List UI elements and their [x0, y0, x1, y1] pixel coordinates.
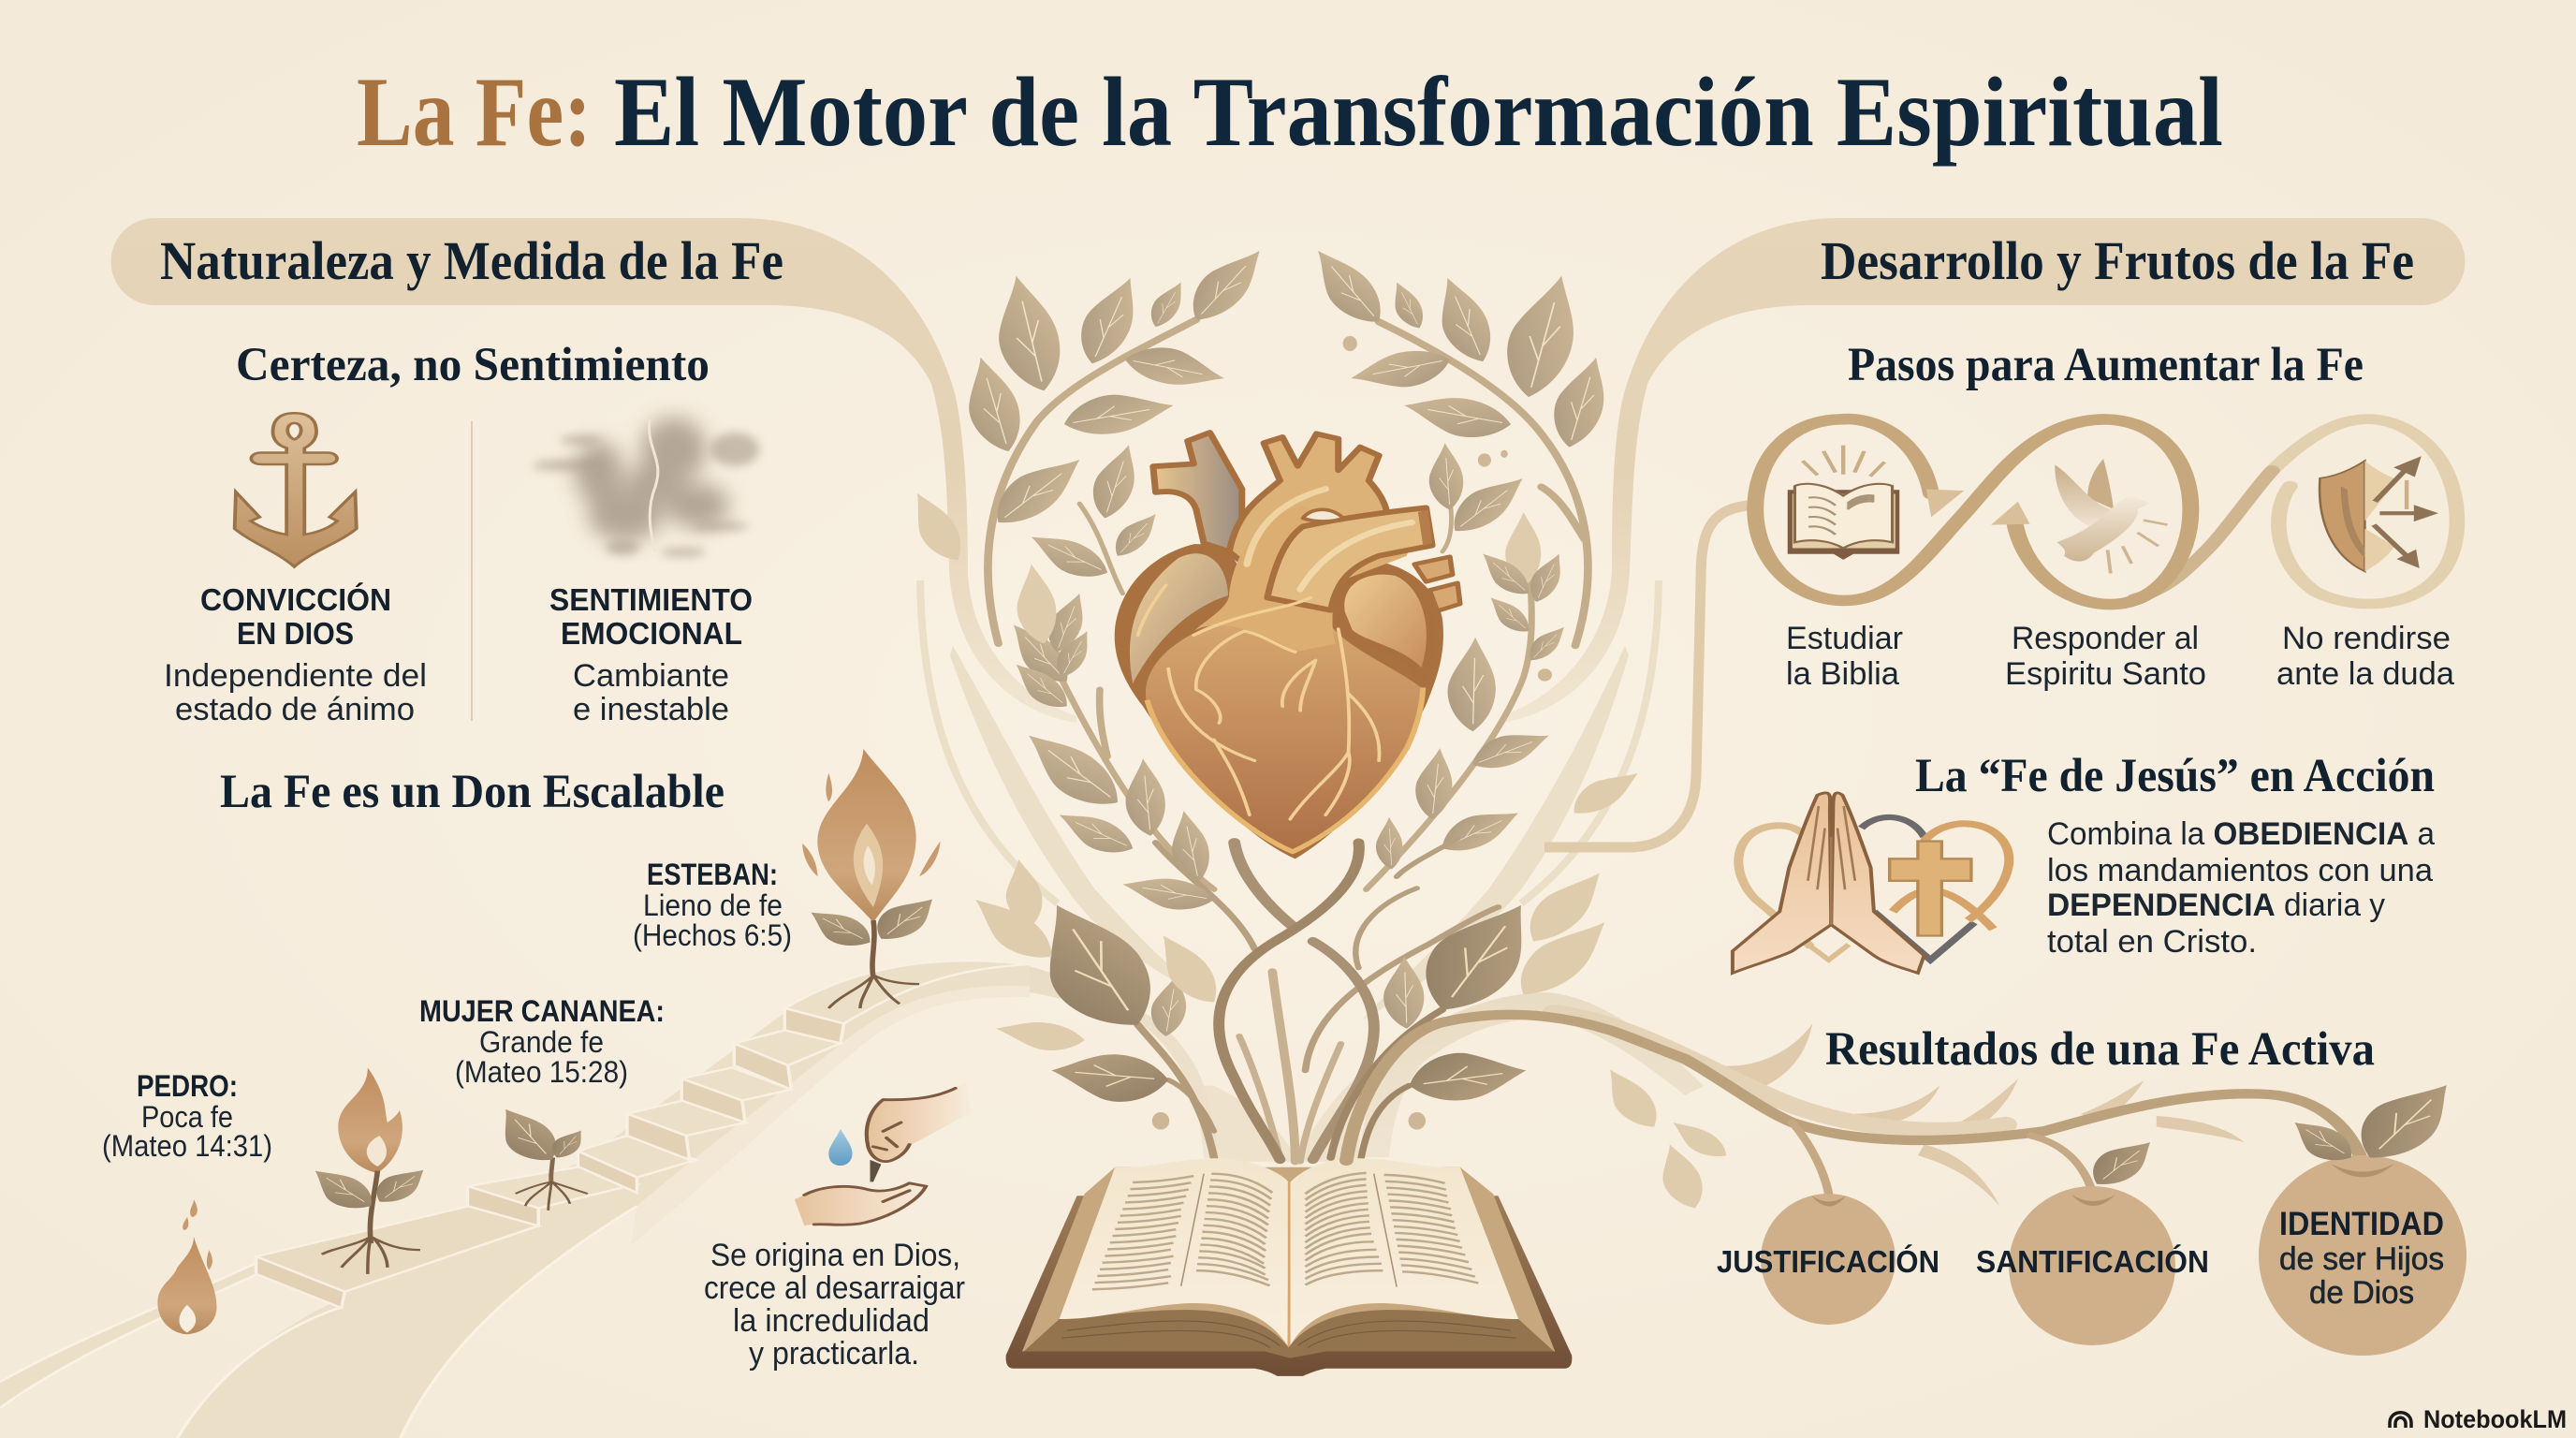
text: conviccion — [164, 582, 427, 727]
fruit: identidad: IDENTIDAD — [2279, 1206, 2444, 1242]
text: se origina en Dios — [704, 1238, 965, 1372]
labels: Esteban: (Hechos 6:5) — [633, 918, 792, 952]
icon: bible — [1788, 446, 1899, 560]
section header: left: Naturaleza y Medida de la Fe — [160, 230, 783, 291]
leaves — [900, 239, 1647, 885]
labels: Esteban: Lieno de fe — [643, 888, 783, 922]
title: La Fe: — [357, 57, 592, 167]
text: combina: Combina la OBEDIENCIA a — [2047, 816, 2435, 852]
labels: Mujer Cananea: (Mateo 15:28) — [455, 1055, 628, 1089]
panel: resultados de una fe activa — [1346, 1013, 2471, 1356]
icon: shield with arrows — [2320, 457, 2437, 571]
NotebookLM logo: NotebookLM — [2423, 1405, 2567, 1433]
icon: dove — [2055, 459, 2168, 573]
panel: certeza, no sentimiento — [164, 339, 759, 727]
step labels: Responder al — [2012, 621, 2199, 656]
labels: Mujer Cananea: Grande fe — [479, 1025, 604, 1059]
text: sentimiento: Cambiante — [573, 658, 729, 694]
icon: praying hands, heart and cross — [1733, 793, 2009, 973]
step labels: Espiritu Santo — [2005, 656, 2206, 692]
step labels: ante la duda — [2276, 656, 2454, 692]
text: se origina en Dios: crece al desarraigar — [704, 1270, 965, 1306]
text: se origina en Dios: y practicarla. — [749, 1336, 919, 1372]
fruit: identidad: de Dios — [2309, 1275, 2414, 1311]
icon: cloud of emotion — [533, 418, 759, 557]
text: sentimiento: e inestable — [573, 692, 729, 727]
text: conviccion: estado de ánimo — [175, 692, 415, 727]
icon: open book — [1006, 1158, 1572, 1376]
text: sentimiento — [549, 582, 753, 727]
tree of faith: lower stems and leaves — [959, 839, 1622, 1162]
labels: Pedro: Poca fe — [141, 1100, 233, 1134]
icon: notebooklm — [2390, 1413, 2411, 1428]
icon: large flame plant (Esteban) — [798, 749, 946, 1008]
fruit: justificacion — [1717, 1194, 1939, 1325]
icon: hands with seed and drop — [795, 1083, 972, 1225]
text: sentimiento: EMOCIONAL — [561, 616, 742, 651]
staircase — [0, 961, 1030, 1438]
labels: Pedro: (Mateo 14:31) — [102, 1129, 272, 1163]
labels: Mujer Cananea — [419, 994, 665, 1089]
labels: Esteban — [633, 858, 792, 952]
heart veins — [1138, 585, 1380, 819]
fruit: identidad: de ser Hijos — [2279, 1241, 2444, 1277]
step labels: Estudiar — [1786, 621, 1903, 656]
twisted central stems — [1138, 839, 1499, 1162]
icon: anchor — [235, 413, 357, 566]
pages — [1060, 1158, 1289, 1345]
text: conviccion: Independiente del — [164, 658, 427, 694]
text: sentimiento: SENTIMIENTO — [549, 582, 753, 617]
icon: sprout — [483, 1102, 591, 1211]
heading: resultados: Resultados de una Fe Activa — [1825, 1023, 2375, 1076]
text: combina: total en Cristo. — [2047, 924, 2257, 960]
text: conviccion: CONVICCIÓN — [200, 582, 391, 617]
icon: flame plant (Mujer step 1) — [300, 1067, 435, 1274]
text: se origina en Dios: la incredulidad — [733, 1303, 929, 1339]
stems — [988, 320, 1588, 889]
step labels: la Biblia — [1786, 656, 1899, 692]
icon: small flame (Pedro) — [157, 1199, 216, 1334]
dots — [1343, 336, 1552, 682]
text lines — [1092, 1173, 1478, 1289]
fruit: santificacion: SANTIFICACIÓN — [1976, 1244, 2209, 1279]
step labels: No rendirse — [2282, 621, 2451, 656]
leaves — [959, 858, 1622, 1107]
tree of faith: upper foliage — [900, 239, 1647, 889]
text: combina: los mandamientos con una — [2047, 853, 2433, 888]
labels: Pedro: PEDRO: — [137, 1069, 238, 1103]
panel: la fe es un don escalable — [0, 749, 1030, 1438]
text: conviccion: EN DIOS — [237, 616, 354, 651]
title: El Motor de la Transformación Espiritual — [614, 57, 2223, 167]
text: combina — [2047, 816, 2435, 960]
section header: right: Desarrollo y Frutos de la Fe — [1821, 230, 2414, 291]
steps ribbon — [1755, 419, 2457, 605]
branch with leaves — [1346, 1013, 2363, 1212]
heading: fe de jesus: La “Fe de Jesús” en Acción — [1915, 750, 2435, 802]
heading: pasos: Pasos para Aumentar la Fe — [1848, 339, 2364, 391]
text: se origina en Dios: Se origina en Dios, — [710, 1238, 960, 1273]
fruit: justificacion: JUSTIFICACIÓN — [1717, 1244, 1939, 1279]
flowing ribbons behind the tree — [110, 218, 2466, 1158]
icon: anatomical heart — [1115, 433, 1460, 858]
dots — [1152, 1112, 1426, 1130]
text: combina: DEPENDENCIA diaria y — [2047, 888, 2385, 923]
heading: certeza: Certeza, no Sentimiento — [236, 339, 710, 391]
fruit: identidad — [2259, 1069, 2471, 1356]
labels: Esteban: ESTEBAN: — [647, 858, 778, 891]
fruit: santificacion — [1976, 1131, 2209, 1345]
divider — [471, 421, 473, 721]
connector to steps — [1544, 506, 1748, 847]
labels: Mujer Cananea: MUJER CANANEA: — [419, 994, 665, 1028]
labels: Pedro — [102, 1069, 272, 1163]
panel: pasos para aumentar la fe — [1755, 339, 2457, 692]
panel: fe de jesus en accion — [1733, 750, 2435, 973]
heading: don escalable: La Fe es un Don Escalable — [220, 766, 724, 818]
step labels — [1786, 621, 2454, 692]
